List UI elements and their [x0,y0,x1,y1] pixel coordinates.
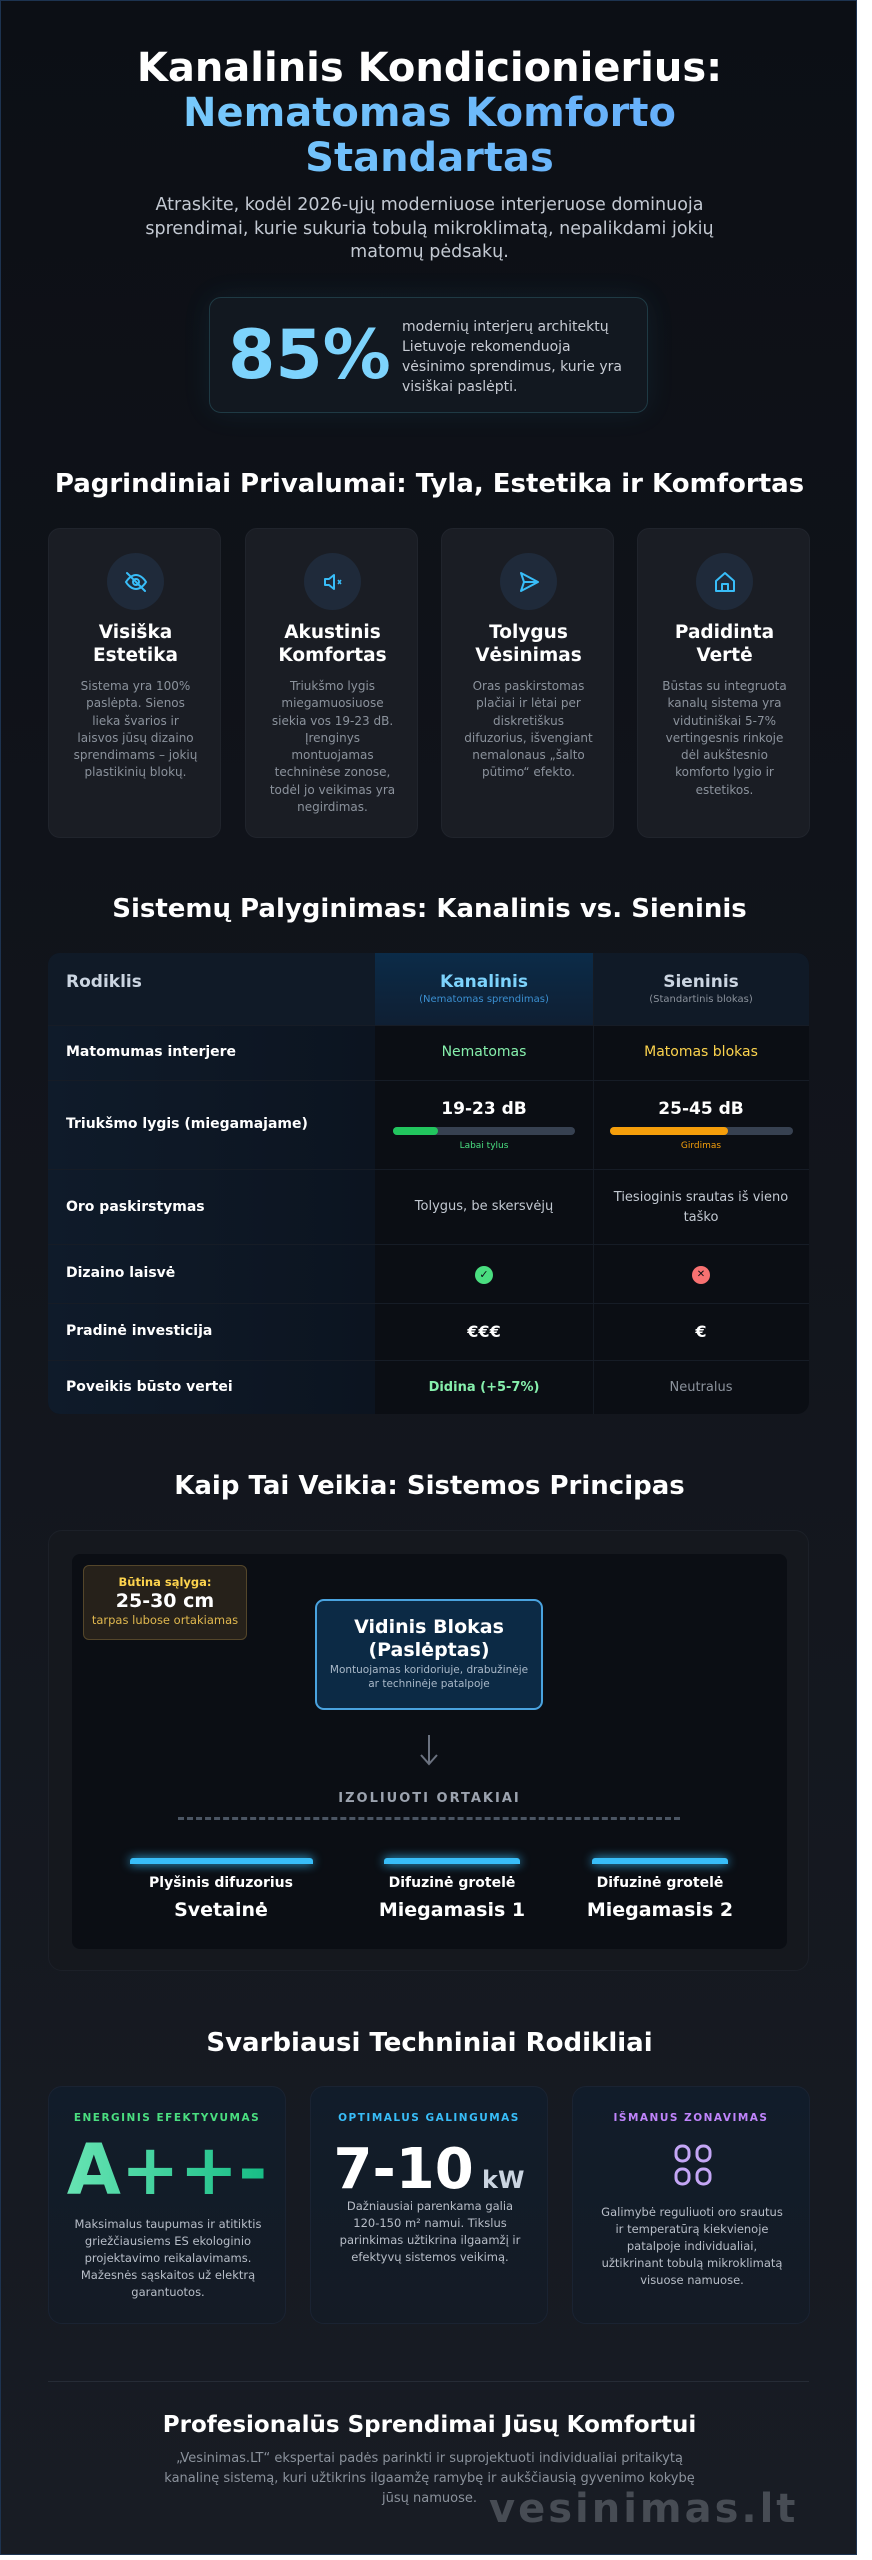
watermark: vesinimas.lt [489,2486,798,2532]
icon: cross: ✕ [697,1269,705,1280]
card: Padidinta Vertė [637,528,810,838]
metric: power: Dažniausiai parenkama galia 120-150 m² namui. Tikslus parinkimas užtikrina ilgaamžį ir efektyvų sistemos veikimą. [340,2199,520,2264]
diffuser: Svetainė: Plyšinis difuzorius [149,1875,293,1891]
diffuser: Miegamasis 1 [378,1850,526,1921]
metric: zoning: IŠMANUS ZONAVIMAS [614,2112,768,2124]
heading: advantages: Pagrindiniai Privalumai: Tyla, Estetika ir Komfortas [55,469,804,499]
row: Pradinė investicija [48,1303,809,1360]
title: Nematomas Komforto [183,90,676,136]
diffuser: Miegamasis 2 [586,1850,734,1921]
row: Matomumas: Matomas blokas [644,1044,758,1060]
big number: 85% [228,316,391,395]
badge: ceiling gap: 25-30 cm [116,1590,214,1612]
icon: speaker [304,553,361,610]
card: Visiška Estetika: Sistema yra 100% paslėpta. Sienos lieka švarios ir laisvos jūsų dizaino sprendimams – jokių plastikinių blokų. [74,679,197,779]
card: Akustinis Komfortas: Triukšmo lygis miegamuosiuose siekia vos 19-23 dB. Įrenginys montuojamas techninėse zonose, todėl jo veikimas yra negirdimas. [270,679,395,814]
title: Standartas [305,135,554,181]
card: Visiška Estetika: Visiška [99,622,172,643]
icon: grid [674,2144,712,2186]
metric: energy efficiency: A++- [67,2129,267,2211]
card: Padidinta Vertė: Vertė [696,645,753,666]
title [137,45,722,181]
diffuser: Svetainė: Svetainė [174,1899,268,1921]
row: Triukšmo lygis: 19-23 dB [441,1099,527,1119]
diffuser: Miegamasis 2: Miegamasis 2 [587,1899,733,1921]
table header: Sieninis [663,972,739,992]
table header: Rodiklis [66,972,142,992]
label: ducts: IZOLIUOTI ORTAKIAI [338,1791,521,1806]
badge: ceiling gap [83,1565,247,1640]
card: Akustinis Komfortas [245,528,418,838]
metric: zoning [572,2086,810,2324]
card: Tolygus Vėsinimas: Tolygus [489,622,568,643]
metric: power: OPTIMALUS GALINGUMAS [338,2112,520,2124]
metric: power [310,2086,548,2324]
row: Dizaino laisvė: Dizaino laisvė [66,1265,175,1281]
row: Matomumas: Matomumas interjere [66,1044,236,1060]
card: Akustinis Komfortas: Akustinis [284,622,381,643]
table header: (Nematomas sprendimas) [419,994,549,1005]
diffuser: Miegamasis 1: Miegamasis 1 [379,1899,525,1921]
row: Triukšmo lygis [48,1080,809,1169]
card: Tolygus Vėsinimas: Vėsinimas [475,645,582,666]
table header [66,972,753,1005]
metric: energy efficiency: ENERGINIS EFEKTYVUMAS [74,2112,260,2124]
table header: (Standartinis blokas) [649,994,753,1005]
row: Triukšmo lygis: 25-45 dB [658,1099,744,1119]
indoor unit box: Vidinis Blokas [354,1616,504,1638]
arrow: down [420,1735,438,1766]
row: Poveikis: Neutralus [670,1380,732,1395]
icon: house [696,553,753,610]
icon: check [475,1266,493,1284]
badge: ceiling gap: Būtina sąlyga: [118,1575,211,1589]
row: Triukšmo lygis: Girdimas [681,1141,721,1151]
row: Pradinė investicija: Pradinė investicija [66,1323,212,1339]
metric: zoning: Galimybė reguliuoti oro srautus ir temperatūrą kiekvienoje patalpoje individualiai, užtikrinant tobulą mikroklimatą visuose namuose. [601,2205,783,2287]
indoor unit box [315,1599,543,1710]
row: Dizaino laisvė [48,1244,809,1303]
diffuser: Miegamasis 2: Difuzinė grotelė [597,1875,723,1891]
footer text: „Vesinimas.LT“ ekspertai padės parinkti ir suprojektuoti individualiai pritaikytą kanalinę sistemą, kuri užtikrins ilgaamžę ramybę ir aukščiausią gyvenimo kokybę jūsų namuose. [164,2451,695,2506]
row: Poveikis [48,1360,809,1414]
row: Triukšmo lygis: Triukšmo lygis (miegamajame) [66,1116,308,1132]
card: Padidinta Vertė: Būstas su integruota kanalų sistema yra vidutiniškai 5-7% vertingesnis rinkoje dėl aukštesnio komforto lygio ir estetikos. [662,679,787,797]
card: Tolygus Vėsinimas: Oras paskirstomas plačiai ir lėtai per diskretiškus difuzorius, išvengiant nemalonaus „šalto pūtimo“ efekto. [464,679,593,779]
diffuser: Svetainė [124,1850,320,1921]
card: Akustinis Komfortas: Komfortas [278,645,387,666]
badge: ceiling gap: tarpas lubose ortakiamas [92,1613,238,1627]
indoor unit box: ar techninėje patalpoje [368,1678,490,1690]
icon: check: ✓ [479,1268,489,1281]
comparison table [48,953,809,1414]
stat box: 85% [209,297,648,413]
icon: eye-off [107,553,164,610]
row: Poveikis: Didina (+5-7%) [429,1380,539,1395]
card: Visiška Estetika [48,528,221,838]
card: Padidinta Vertė: Padidinta [675,622,774,643]
row: Oro paskirstymas: Oro paskirstymas [66,1199,205,1215]
heading: how it works: Kaip Tai Veikia: Sistemos Principas [174,1471,685,1501]
heading: comparison: Sistemų Palyginimas: Kanalinis vs. Sieninis [112,894,747,924]
metric: energy efficiency: Maksimalus taupumas ir atitiktis griežčiausiems ES ekologinio projektavimo reikalavimams. Mažesnės sąskaitos už elektrą garantuotos. [75,2217,261,2299]
row: Poveikis: Poveikis būsto vertei [66,1379,233,1395]
indoor unit box: Montuojamas koridoriuje, drabužinėje [330,1664,528,1676]
row: Matomumas: Nematomas [442,1044,526,1060]
row: Oro paskirstymas: Tiesioginis srautas iš vieno taško [614,1190,788,1225]
card: Tolygus Vėsinimas [441,528,614,838]
icon: send [500,553,557,610]
row: Matomumas [48,1025,809,1080]
subtitle: Atraskite, kodėl 2026-ųjų moderniuose interjeruose dominuoja sprendimai, kurie sukuria tobulą mikroklimatą, nepalikdami jokių matomų pėdsakų. [145,195,714,262]
footer title: Profesionalūs Sprendimai Jūsų Komfortui [163,2412,696,2438]
stat text: modernių interjerų architektų Lietuvoje rekomenduoja vėsinimo sprendimus, kurie yra visiškai paslėpti. [402,319,622,395]
row: Oro paskirstymas [48,1169,809,1244]
card: Visiška Estetika: Estetika [93,645,178,666]
diagram panel [48,1530,809,1971]
indoor unit box: (Paslėptas) [368,1639,490,1661]
row: Oro paskirstymas: Tolygus, be skersvėjų [415,1199,553,1214]
row: Pradinė investicija: € [695,1322,707,1341]
heading: technical metrics: Svarbiausi Techniniai Rodikliai [206,2028,653,2058]
table header: Kanalinis [440,972,528,992]
row: Pradinė investicija: €€€ [467,1322,501,1341]
diffuser: Miegamasis 1: Difuzinė grotelė [389,1875,515,1891]
title: Kanalinis Kondicionierius: [137,45,722,91]
metric: energy efficiency [48,2086,286,2324]
row: Triukšmo lygis: Labai tylus [460,1141,508,1151]
metric: power: 7-10 kW [334,2137,524,2202]
icon: cross [692,1266,710,1284]
